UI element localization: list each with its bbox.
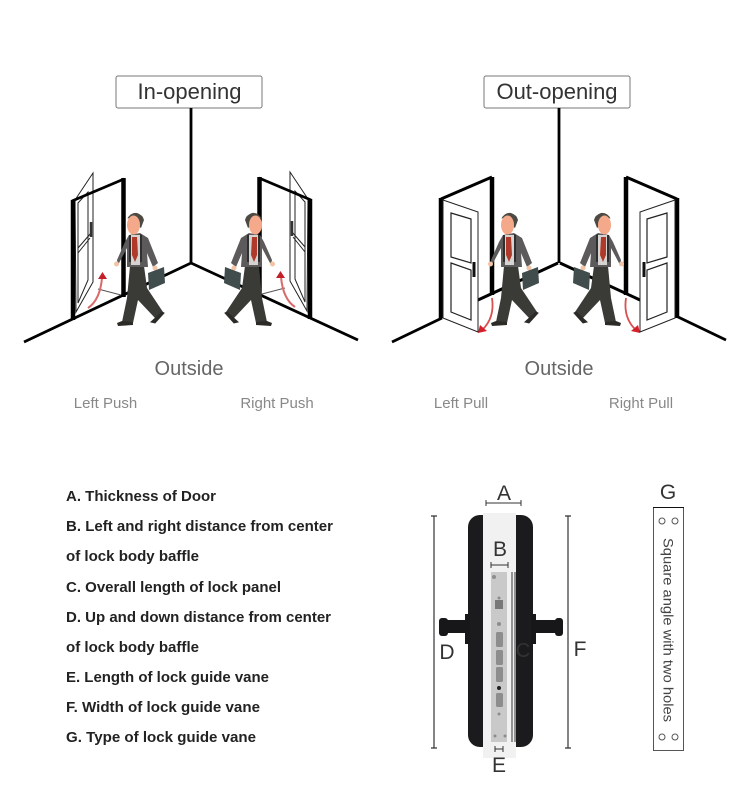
heading: Out-opening [484, 76, 630, 108]
text block: dimension legend: G. Type of lock guide vane [66, 730, 256, 746]
dimension A: A [497, 482, 511, 505]
left pull door [441, 177, 558, 333]
dimension A [486, 482, 521, 506]
dimension F [565, 516, 586, 748]
dimension B: B [493, 538, 507, 561]
guide vane strip [512, 572, 515, 742]
dimension D [431, 516, 455, 748]
heading: In-opening: In-opening [138, 79, 241, 104]
label: Left Push: Left Push [74, 395, 137, 412]
text block: dimension legend: of lock body baffle [66, 640, 199, 656]
text block: dimension legend: B. Left and right distance from center [66, 519, 333, 535]
guide vane type G [653, 481, 684, 750]
text block: dimension legend: C. Overall length of lock panel [66, 580, 281, 596]
label: Outside left: Outside [155, 358, 223, 380]
person walking left side [114, 213, 165, 326]
person walking right side [224, 213, 275, 326]
lock body [468, 515, 533, 747]
person walking right side [573, 213, 624, 326]
dimension E: E [492, 754, 506, 777]
vane holes [659, 518, 678, 740]
text block: dimension legend [66, 489, 333, 746]
text block: dimension legend: F. Width of lock guide vane [66, 700, 260, 716]
heading: In-opening [116, 76, 262, 108]
person walking left side [488, 213, 539, 326]
left handle [439, 614, 470, 644]
label C: C [516, 640, 530, 662]
text block: dimension legend: D. Up and down distance from center [66, 610, 331, 626]
right pull door [560, 177, 677, 333]
panel: out-opening door diagram [392, 76, 726, 342]
panel: in-opening door diagram [24, 76, 358, 342]
vane caption: Square angle with two holes [660, 538, 676, 722]
label: Right Pull: Right Pull [609, 395, 673, 412]
door section [483, 513, 516, 758]
text block: dimension legend: A. Thickness of Door [66, 489, 216, 505]
text block: dimension legend: E. Length of lock guide vane [66, 670, 269, 686]
right handle [531, 614, 563, 644]
plate holes [492, 575, 506, 738]
label: Outside right: Outside [525, 358, 593, 380]
room corner lines [24, 108, 358, 342]
label: Right Push: Right Push [240, 395, 314, 412]
left push door [72, 173, 124, 320]
dimension D: D [439, 641, 455, 664]
dimension B [491, 538, 508, 568]
room corner lines [392, 108, 726, 342]
heading: Out-opening: Out-opening [496, 79, 618, 104]
right push door [259, 172, 311, 319]
lock plate [491, 572, 507, 742]
dimension F: F [574, 638, 586, 661]
label: Left Pull: Left Pull [434, 395, 488, 412]
label G: G [660, 481, 676, 504]
lock side view diagram [439, 513, 563, 758]
text block: dimension legend: of lock body baffle [66, 549, 199, 565]
vane outline [654, 508, 684, 750]
